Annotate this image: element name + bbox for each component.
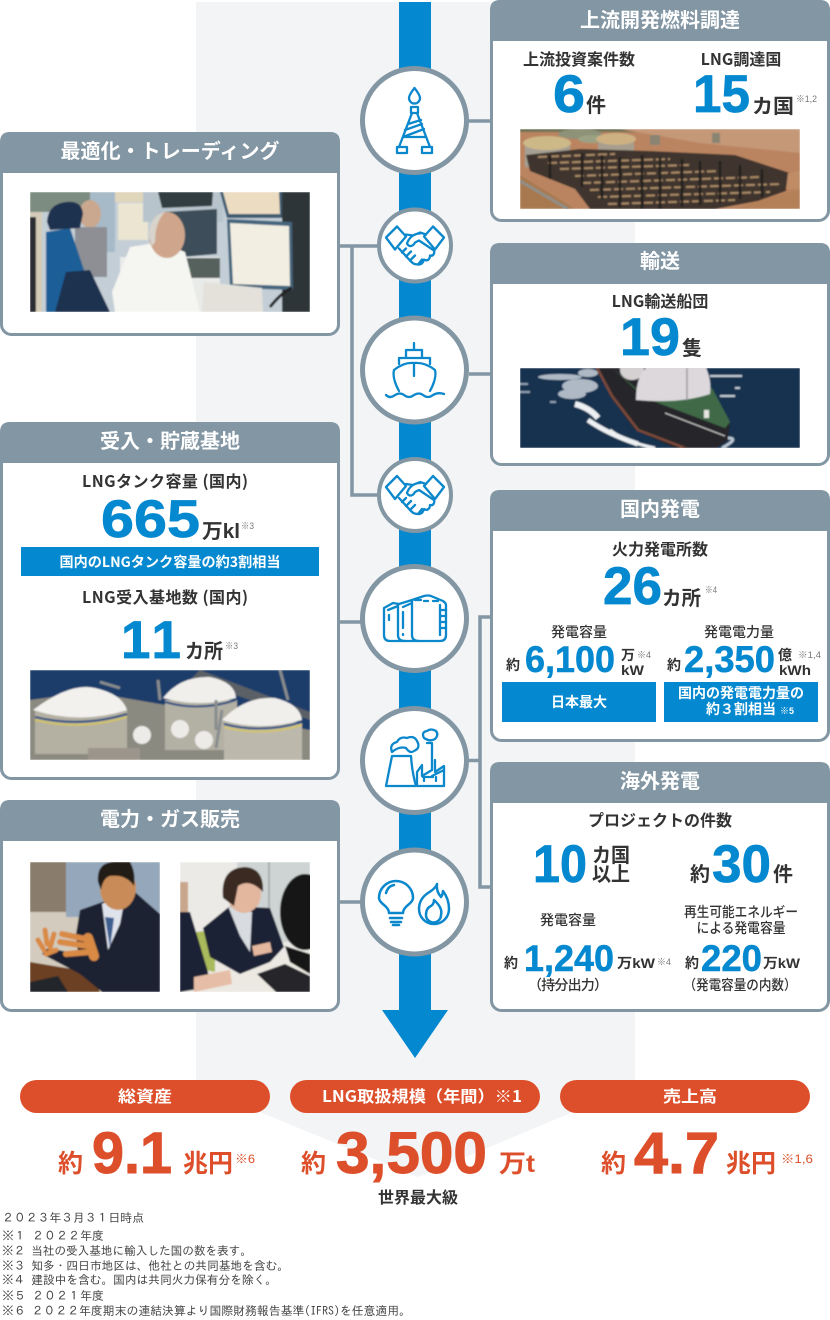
callout: 30 percent of domestic generation: ※5 bbox=[780, 706, 794, 716]
icon circle: gas tower bbox=[362, 68, 466, 172]
photo: LNG carrier bbox=[520, 368, 800, 448]
stat: overseas capacity: （持分出力） bbox=[528, 975, 608, 995]
stat: thermal plants: カ所 bbox=[662, 587, 701, 610]
footnotes: ※５ ２０２１年度 bbox=[2, 1289, 104, 1302]
stat: upstream projects: 件 bbox=[586, 94, 606, 117]
heading: 国内発電 bbox=[620, 493, 700, 522]
panel: receiving and storage terminals bbox=[0, 422, 340, 778]
stat: projects: 約 bbox=[690, 863, 710, 886]
stat: thermal plants: ※4 bbox=[705, 585, 717, 595]
stat: countries: 以上 bbox=[592, 863, 630, 886]
figure: revenue: 約 bbox=[601, 1150, 626, 1178]
stat: LNG tank capacity: 万kl bbox=[202, 521, 240, 543]
icon circle: handshake (trading to terminals) bbox=[379, 459, 451, 531]
footnotes bbox=[2, 1211, 411, 1317]
stat: renewable capacity bbox=[684, 902, 801, 995]
panel header bbox=[490, 762, 830, 803]
caption: world's largest class: 世界最大級 bbox=[378, 1184, 458, 1208]
subheading: number of projects: プロジェクトの件数 bbox=[588, 807, 732, 831]
figure: total assets: 兆円 bbox=[183, 1150, 233, 1178]
panel header bbox=[490, 243, 830, 284]
stat: LNG procurement countries: ※1,2 bbox=[796, 94, 817, 104]
stat: upstream projects: 上流投資案件数 bbox=[523, 46, 635, 70]
stat: generated electricity: 発電電力量 bbox=[704, 622, 774, 642]
figure: revenue: ※1,6 bbox=[781, 1152, 813, 1166]
stat: thermal plants bbox=[603, 536, 717, 616]
figure: revenue: 4.7 bbox=[634, 1121, 719, 1186]
stat: countries: 10 bbox=[533, 835, 587, 894]
stat: LNG procurement countries: LNG調達国 bbox=[701, 46, 781, 70]
figure: LNG handling volume: 約 bbox=[301, 1150, 326, 1178]
stat: renewable capacity: 万kW bbox=[763, 955, 801, 971]
stat: generated electricity: 約 bbox=[667, 657, 681, 673]
stat: generation capacity: ※4 bbox=[637, 650, 651, 660]
stat: countries: カ国 bbox=[592, 845, 630, 867]
stat: overseas capacity: 約 bbox=[504, 955, 518, 971]
panel: optimization and trading bbox=[0, 132, 340, 334]
panel header bbox=[490, 490, 830, 531]
callout: 30 percent of domestic generation bbox=[664, 682, 818, 722]
icon circle: light bulb and flame bbox=[362, 850, 466, 954]
stat: projects: 30 bbox=[712, 835, 771, 894]
stat: generated electricity bbox=[667, 622, 821, 680]
stat: countries bbox=[533, 835, 630, 894]
callout: largest in Japan: 日本最大 bbox=[551, 692, 607, 712]
photo: LNG tanks bbox=[30, 670, 310, 760]
figure: total assets: 9.1 bbox=[92, 1121, 172, 1186]
footnotes: ※１ ２０２２年度 bbox=[2, 1229, 104, 1242]
pill: LNG handling volume bbox=[290, 1080, 540, 1113]
panel header bbox=[490, 0, 830, 41]
background funnel bbox=[196, 2, 635, 1177]
stat: thermal plants: 26 bbox=[603, 557, 662, 616]
stat: generation capacity: 約 bbox=[506, 657, 520, 673]
footnotes: ※３ 知多・四日市地区は、他社との共同基地を含む。 bbox=[2, 1259, 289, 1272]
stat: LNG procurement countries: カ国 bbox=[752, 96, 794, 118]
stat: upstream projects bbox=[523, 46, 635, 124]
stat: generated electricity: 2,350 bbox=[684, 639, 775, 680]
stat: overseas capacity bbox=[504, 910, 671, 995]
stat: LNG fleet: 隻 bbox=[682, 337, 702, 360]
callout: 30 percent of domestic LNG tanks bbox=[21, 547, 319, 576]
connector lines bbox=[340, 121, 490, 902]
pill: total assets: 総資産 bbox=[118, 1083, 172, 1107]
stat: overseas capacity: 万kW bbox=[617, 955, 656, 971]
stat: renewable capacity: 約 bbox=[685, 955, 699, 971]
pill: revenue bbox=[560, 1080, 810, 1113]
panel header bbox=[0, 800, 340, 841]
photo: businesswoman bbox=[180, 862, 310, 992]
heading: 上流開発燃料調達 bbox=[580, 4, 740, 33]
figure: revenue: 兆円 bbox=[726, 1150, 776, 1178]
panel header bbox=[0, 422, 340, 463]
panel: power and gas sales bbox=[0, 800, 340, 1010]
photo: LNG plant bbox=[520, 129, 800, 209]
figure: revenue bbox=[601, 1121, 813, 1186]
panel header bbox=[0, 132, 340, 173]
footnotes: ２０２３年３月３１日時点 bbox=[2, 1211, 144, 1224]
stat: generation capacity: 6,100 bbox=[525, 639, 615, 680]
stat: upstream projects: 6 bbox=[553, 65, 585, 124]
figure: total assets: 約 bbox=[58, 1150, 83, 1178]
callout: 30 percent of domestic generation: 約３割相当 bbox=[706, 699, 776, 719]
stat: LNG tank capacity: ※3 bbox=[241, 521, 254, 531]
figure: total assets bbox=[58, 1121, 255, 1186]
stat: generation capacity: kW bbox=[621, 662, 645, 678]
footnotes: ※６ ２０２２年度期末の連結決算より国際財務報告基準(IFRS)を任意適用。 bbox=[2, 1304, 411, 1317]
heading: 輸送 bbox=[640, 245, 680, 274]
stat: generated electricity: kWh bbox=[779, 662, 811, 678]
pill: LNG handling volume: LNG取扱規模（年間）※1 bbox=[322, 1083, 522, 1107]
panel: transport bbox=[490, 243, 830, 464]
heading: 海外発電 bbox=[620, 765, 700, 794]
stat: LNG terminals: カ所 bbox=[185, 640, 223, 663]
stat: LNG fleet: LNG輸送船団 bbox=[612, 288, 708, 312]
photo: trader at monitors bbox=[30, 192, 310, 312]
stat: LNG terminals: LNG受入基地数 (国内) bbox=[82, 584, 248, 608]
flow arrow bbox=[382, 2, 448, 1058]
stat: generation capacity: 発電容量 bbox=[551, 622, 607, 642]
stat: renewable capacity: による発電容量 bbox=[696, 918, 786, 938]
stat: LNG fleet bbox=[612, 288, 708, 367]
callout: largest in Japan bbox=[502, 682, 656, 722]
photo: businessman bbox=[30, 862, 160, 992]
stat: LNG procurement countries bbox=[693, 46, 817, 124]
stat: LNG tank capacity: 665 bbox=[101, 490, 200, 549]
stat: LNG procurement countries: 15 bbox=[693, 65, 750, 124]
figure: LNG handling volume: 3,500 bbox=[336, 1121, 487, 1186]
stat: overseas capacity: 1,240 bbox=[524, 938, 614, 979]
callout: 30 percent of domestic generation: 国内の発電電力量の bbox=[678, 683, 804, 703]
stat: projects: 件 bbox=[773, 863, 793, 886]
heading: 電力・ガス販売 bbox=[100, 803, 240, 832]
heading: 受入・貯蔵基地 bbox=[100, 425, 240, 454]
stat: overseas capacity: ※4 bbox=[657, 957, 671, 967]
pill: revenue: 売上高 bbox=[663, 1083, 717, 1107]
panel: domestic power generation bbox=[490, 490, 830, 740]
footnotes: ※４ 建設中を含む。国内は共同火力保有分を除く。 bbox=[2, 1273, 277, 1286]
icon circle: ship bbox=[362, 318, 466, 422]
stat: LNG tank capacity: LNGタンク容量 (国内) bbox=[82, 468, 248, 492]
figure: LNG handling volume: 万t bbox=[499, 1150, 536, 1178]
stat: generation capacity bbox=[506, 622, 651, 680]
stat: renewable capacity: 再生可能エネルギー bbox=[684, 902, 798, 922]
stat: LNG terminals: ※3 bbox=[225, 641, 238, 651]
icon circle: handshake bbox=[379, 210, 451, 282]
stat: LNG terminals bbox=[82, 584, 248, 670]
panel: upstream development and fuel procurement bbox=[490, 0, 830, 220]
footnotes: ※２ 当社の受入基地に輸入した国の数を表す。 bbox=[2, 1244, 252, 1257]
stat: generation capacity: 万 bbox=[621, 647, 635, 663]
icon circle: power plant bbox=[362, 708, 466, 812]
callout: 30 percent of domestic LNG tanks: 国内のLNGタンク容量の約3割相当 bbox=[60, 552, 280, 572]
pill: total assets bbox=[20, 1080, 270, 1113]
stat: overseas capacity: 発電容量 bbox=[540, 910, 596, 930]
figure: total assets: ※6 bbox=[235, 1152, 255, 1166]
icon circle: storage tanks bbox=[362, 566, 466, 670]
stat: renewable capacity: 220 bbox=[701, 938, 762, 979]
heading: 最適化・トレーディング bbox=[60, 135, 280, 164]
stat: generated electricity: 億 bbox=[778, 647, 792, 663]
stat: projects bbox=[690, 835, 793, 894]
stat: LNG fleet: 19 bbox=[620, 308, 680, 367]
figure: LNG handling volume bbox=[301, 1121, 536, 1186]
stat: renewable capacity: （発電容量の内数） bbox=[684, 975, 796, 995]
stat: generated electricity: ※1,4 bbox=[798, 650, 821, 660]
stat: thermal plants: 火力発電所数 bbox=[612, 536, 708, 560]
stat: LNG terminals: 11 bbox=[121, 611, 181, 670]
panel: overseas power generation bbox=[490, 762, 830, 1010]
stat: LNG tank capacity bbox=[82, 468, 254, 549]
